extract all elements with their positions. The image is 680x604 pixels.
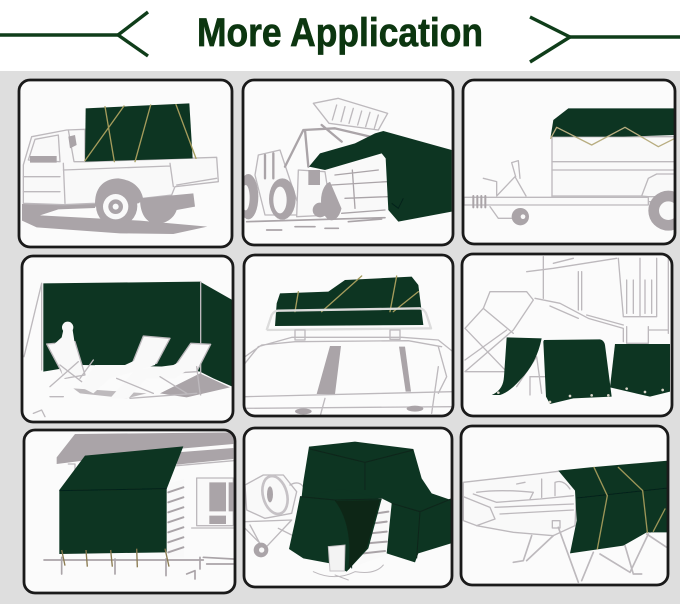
tarp xyxy=(309,131,452,222)
zigzag rope xyxy=(551,127,675,147)
ropes xyxy=(85,105,196,162)
panel: trailer with tarp xyxy=(463,80,680,244)
tarp xyxy=(59,446,183,554)
window xyxy=(197,478,233,526)
tarp xyxy=(558,461,668,553)
tarp xyxy=(85,103,193,162)
panel: pickup truck with tarp xyxy=(19,80,232,247)
title: More Application xyxy=(197,11,483,55)
tarps xyxy=(302,442,451,562)
header band xyxy=(0,11,680,62)
bucket xyxy=(328,545,345,571)
tarp xyxy=(551,108,675,137)
figures in deck chairs xyxy=(47,342,85,378)
panel: tractor and hay with tarp xyxy=(238,80,453,245)
left arrow ornament xyxy=(0,12,148,56)
tarps xyxy=(492,337,542,395)
rack xyxy=(267,308,431,330)
panel: boat on trailer with tarp xyxy=(461,426,668,585)
tarp xyxy=(275,277,423,326)
guy ropes xyxy=(62,549,169,567)
ropes xyxy=(594,467,647,549)
tarp xyxy=(43,282,232,387)
panel: boat and building with tarps xyxy=(462,254,672,416)
panel: house awning tarp xyxy=(24,430,235,593)
lower scatter and shutter xyxy=(358,498,392,565)
panel: roof rack with tarp xyxy=(244,255,455,417)
mixer xyxy=(245,475,297,518)
panel: cement mixer and covered piles xyxy=(244,428,452,587)
right arrow ornament xyxy=(530,17,680,62)
panel: sunbathers with windbreak xyxy=(22,256,233,422)
eyelets xyxy=(497,387,664,403)
shutter xyxy=(167,479,184,557)
ground rails xyxy=(44,557,233,579)
